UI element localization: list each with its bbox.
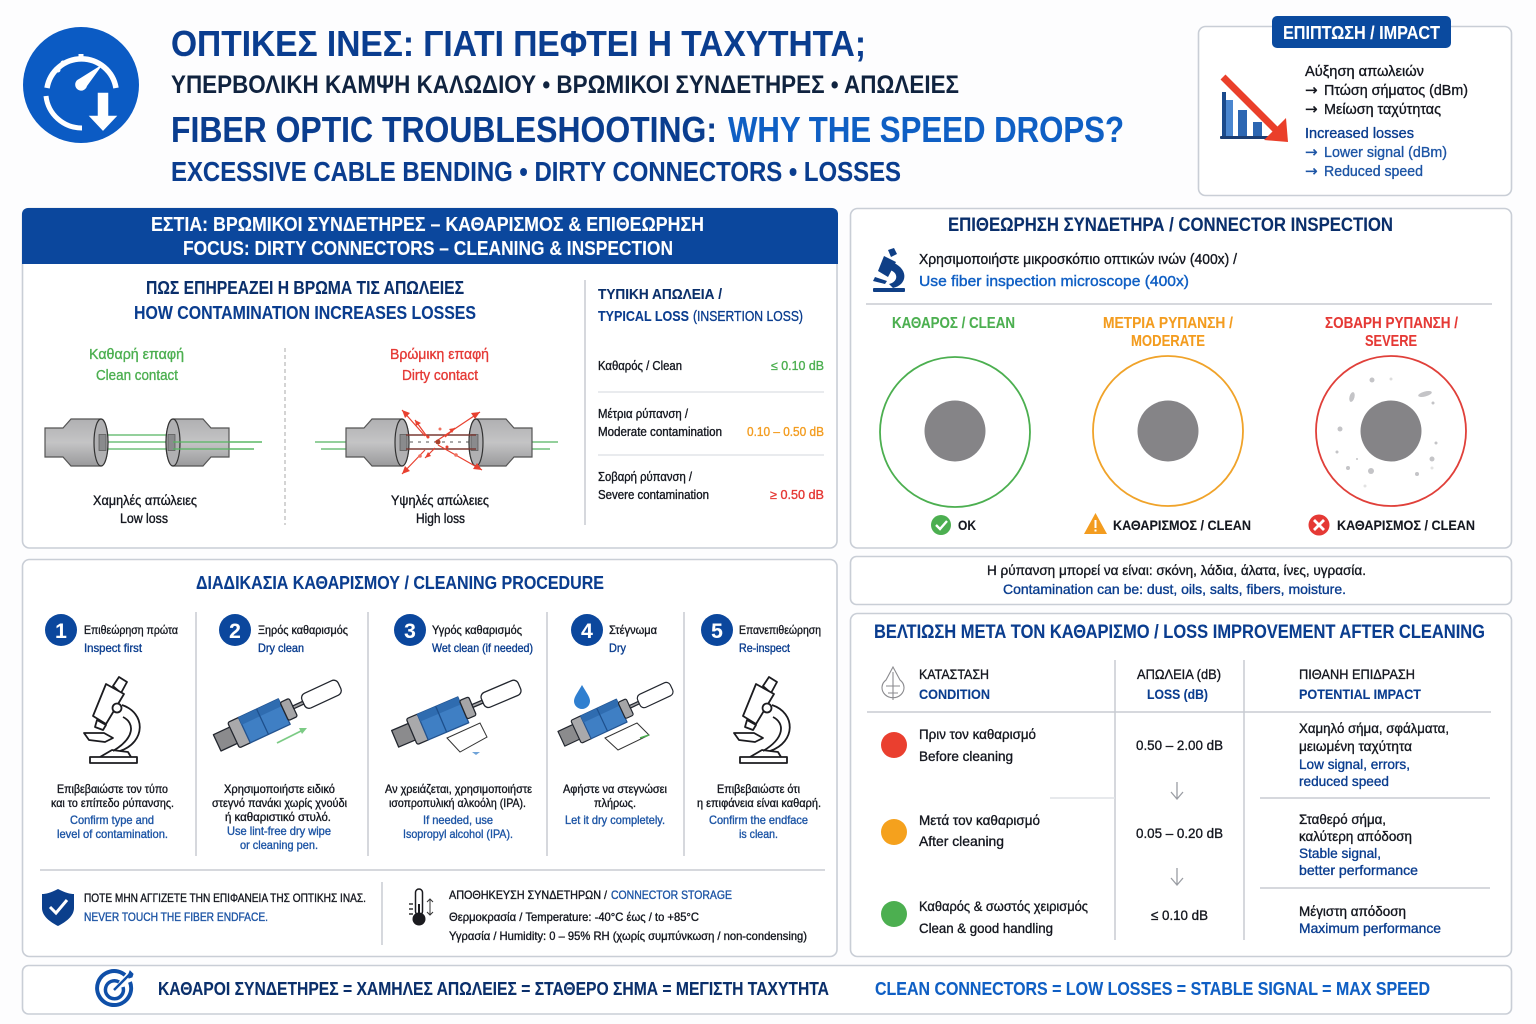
step 5: re-inspect: Επιβεβαιώστε ότι: [717, 782, 800, 796]
step 4: dry: Let it dry completely.: [565, 813, 665, 827]
step 4: dry: Αφήστε να στεγνώσει: [563, 782, 667, 796]
impact tab heading: ΕΠΙΠΤΩΣΗ / IMPACT: [1283, 23, 1440, 43]
row: after cleaning: Μετά τον καθαρισμό: [919, 812, 1040, 828]
summary equation english: CLEAN CONNECTORS = LOW LOSSES = STABLE SIGNAL = MAX SPEED: [875, 978, 1430, 999]
step 1: inspect first: [45, 614, 178, 841]
impact text: Increased losses: [1305, 125, 1414, 142]
row: after cleaning: Stable signal,: [1299, 845, 1381, 861]
inspection: moderate contamination endface: ΜΕΤΡΙΑ ΡΥΠΑΝΣΗ /: [1103, 315, 1234, 332]
low loss caption: Low loss: [120, 511, 168, 526]
step 5: re-inspect: Επανεπιθεώρηση: [739, 623, 821, 637]
title block: ΥΠΕΡΒΟΛΙΚΗ ΚΑΜΨΗ ΚΑΛΩΔΙΟΥ • ΒΡΩΜΙΚΟΙ ΣΥΝΔΕΤΗΡΕΣ • ΑΠΩΛΕΙΕΣ: [171, 71, 959, 99]
typical loss table: Καθαρός / Clean: [598, 359, 682, 373]
high loss caption: Υψηλές απώλειες: [391, 493, 489, 508]
step 4: dry: Στέγνωμα: [609, 623, 657, 637]
typical loss table: Σοβαρή ρύπανση /: [598, 470, 692, 484]
step 3: wet clean: [385, 614, 533, 841]
connector storage text: Υγρασία / Humidity: 0 – 95% RH (χωρίς συμπύνκωση / non-condensing): [449, 929, 807, 943]
step 4: dry: πλήρως.: [594, 796, 636, 810]
step 3: wet clean: 3: [404, 620, 416, 643]
connector storage text: ΑΠΟΘΗΚΕΥΣΗ ΣΥΝΔΕΤΗΡΩΝ /: [449, 888, 608, 902]
impact text: →: [1305, 162, 1318, 180]
step 2: dry clean: [211, 614, 348, 852]
clean contact label: [89, 346, 184, 384]
icon: falling bars with red arrow: [1220, 77, 1288, 142]
table column headers: ΠΙΘΑΝΗ ΕΠΙΔΡΑΣΗ: [1299, 666, 1415, 682]
focus header band: FOCUS: DIRTY CONNECTORS – CLEANING & INSPECTION: [183, 238, 673, 260]
table column headers: POTENTIAL IMPACT: [1299, 686, 1421, 702]
contamination heading: HOW CONTAMINATION INCREASES LOSSES: [134, 303, 476, 323]
focus header band: ΕΣΤΙΑ: ΒΡΩΜΙΚΟΙ ΣΥΝΔΕΤΗΡΕΣ – ΚΑΘΑΡΙΣΜΟΣ & ΕΠΙΘΕΩΡΗΣΗ: [151, 214, 704, 236]
row: after cleaning: Σταθερό σήμα,: [1299, 811, 1386, 827]
inspection: severe contamination endface: [1308, 315, 1475, 536]
microscope instruction: Χρησιμοποιήστε μικροσκόπιο οπτικών ινών (400x) /: [919, 252, 1238, 268]
row: before cleaning: [881, 720, 1449, 789]
diagram: clean connector contact: [45, 419, 262, 466]
typical loss table: [598, 286, 824, 502]
step 5: re-inspect: [697, 614, 821, 841]
row: before cleaning: reduced speed: [1299, 773, 1389, 789]
inspection: clean endface: ΚΑΘΑΡΟΣ / CLEAN: [892, 315, 1015, 332]
title block: [171, 23, 1124, 187]
typical loss table: (INSERTION LOSS): [693, 308, 803, 325]
icon: condition gauge pin: [882, 667, 904, 700]
row: clean and good handling: Maximum performance: [1299, 920, 1441, 936]
typical loss table: Moderate contamination: [598, 425, 722, 439]
inspection: clean endface: [880, 315, 1030, 535]
panel: connector inspection: [850, 208, 1512, 548]
step 5: re-inspect: Confirm the endface: [709, 813, 808, 827]
step 2: dry clean: Dry clean: [258, 641, 304, 655]
procedure heading: ΔΙΑΔΙΚΑΣΙΑ ΚΑΘΑΡΙΣΜΟΥ / CLEANING PROCEDURE: [196, 573, 604, 593]
high loss caption: High loss: [416, 511, 465, 526]
connector storage text: [449, 888, 807, 943]
typical loss table: ≥ 0.50 dB: [770, 488, 824, 502]
title block: EXCESSIVE CABLE BENDING • DIRTY CONNECTORS • LOSSES: [171, 156, 901, 187]
diagram: dirty connector contact with scattering: [315, 410, 558, 474]
inspection: severe contamination endface: ΚΑΘΑΡΙΣΜΟΣ / CLEAN: [1337, 517, 1475, 533]
row: clean and good handling: Μέγιστη απόδοση: [1299, 903, 1406, 919]
inspection: moderate contamination endface: MODERATE: [1131, 333, 1205, 350]
icon: speed gauge with down arrow: [23, 27, 139, 143]
step 2: dry clean: ή καθαριστικό στυλό.: [225, 810, 331, 824]
step 5: re-inspect: 5: [711, 620, 723, 643]
table column headers: [919, 666, 1421, 702]
table column headers: ΚΑΤΑΣΤΑΣΗ: [919, 666, 989, 682]
inspection: moderate contamination endface: ΚΑΘΑΡΙΣΜΟΣ / CLEAN: [1113, 517, 1251, 533]
low loss caption: Χαμηλές απώλειες: [93, 493, 197, 508]
panel: impact: [1198, 16, 1512, 196]
typical loss table: ΤΥΠΙΚΗ ΑΠΩΛΕΙΑ /: [598, 286, 723, 303]
warning text: never touch endface: ΠΟΤΕ ΜΗΝ ΑΓΓΙΖΕΤΕ ΤΗΝ ΕΠΙΦΑΝΕΙΑ ΤΗΣ ΟΠΤΙΚΗΣ ΙΝΑΣ.: [84, 891, 366, 905]
step 4: dry: Dry: [609, 641, 626, 655]
dirty contact label: Dirty contact: [402, 367, 479, 384]
typical loss table: Μέτρια ρύπανση /: [598, 407, 688, 421]
microscope instruction: [919, 252, 1238, 290]
typical loss table: Severe contamination: [598, 488, 709, 502]
typical loss table: 0.10 – 0.50 dB: [747, 425, 824, 439]
icon: target with arrow: [97, 971, 133, 1005]
impact text: →: [1305, 81, 1318, 99]
clean contact label: Καθαρή επαφή: [89, 346, 184, 363]
clean contact label: Clean contact: [96, 367, 179, 384]
table column headers: CONDITION: [919, 686, 990, 702]
step 5: re-inspect: Re-inspect: [739, 641, 791, 655]
step 4: dry: 4: [581, 620, 593, 643]
panel: bottom summary banner: [22, 966, 1512, 1014]
step 3: wet clean: Isopropyl alcohol (IPA).: [403, 827, 513, 841]
high loss caption: [391, 493, 489, 526]
impact tab heading: [1272, 16, 1451, 48]
panel: contamination note: [850, 556, 1512, 604]
step 2: dry clean: Ξηρός καθαρισμός: [258, 623, 348, 637]
panel: focus on dirty connectors: [22, 208, 838, 548]
row: after cleaning: After cleaning: [919, 833, 1004, 849]
step 2: dry clean: στεγνό πανάκι χωρίς χνούδι: [212, 796, 347, 810]
row: before cleaning: Πριν τον καθαρισμό: [919, 726, 1036, 742]
panel: cleaning procedure: [22, 560, 837, 956]
row: before cleaning: Low signal, errors,: [1299, 756, 1410, 772]
step 1: inspect first: 1: [55, 620, 67, 643]
title block: ΟΠΤΙΚΕΣ ΙΝΕΣ: ΓΙΑΤΙ ΠΕΦΤΕΙ Η ΤΑΧΥΤΗΤΑ;: [171, 23, 866, 64]
impact text: Πτώση σήματος (dBm): [1324, 82, 1468, 99]
impact text: →: [1305, 143, 1318, 161]
panel: contamination note: Η ρύπανση μπορεί να είναι: σκόνη, λάδια, άλατα, ίνες, υγρασία.: [987, 562, 1366, 578]
step 1: inspect first: level of contamination.: [57, 827, 168, 841]
arrow: down to clean handling: [1171, 868, 1183, 885]
row: before cleaning: 0.50 – 2.00 dB: [1136, 737, 1223, 753]
typical loss table: TYPICAL LOSS: [598, 308, 689, 325]
icon: navy microscope: [873, 248, 905, 292]
microscope instruction: Use fiber inspection microscope (400x): [919, 273, 1189, 290]
row: clean and good handling: ≤ 0.10 dB: [1151, 907, 1208, 923]
step 1: inspect first: Inspect first: [84, 641, 143, 655]
step 2: dry clean: Χρησιμοποιήστε ειδικό: [224, 782, 335, 796]
icon: shield with check: [42, 889, 74, 926]
panel: loss improvement table: [850, 614, 1512, 956]
title block: FIBER OPTIC TROUBLESHOOTING:: [171, 109, 717, 150]
connector storage text: CONNECTOR STORAGE: [611, 888, 732, 902]
row: clean and good handling: [881, 898, 1441, 936]
step 5: re-inspect: is clean.: [739, 827, 778, 841]
warning text: never touch endface: [84, 891, 366, 924]
dirty contact label: Βρώμικη επαφή: [390, 346, 489, 363]
impact text: [1305, 63, 1468, 180]
impact text: Reduced speed: [1324, 163, 1423, 180]
inspection heading: ΕΠΙΘΕΩΡΗΣΗ ΣΥΝΔΕΤΗΡΑ / CONNECTOR INSPECTION: [948, 215, 1393, 236]
row: after cleaning: καλύτερη απόδοση: [1299, 828, 1412, 844]
inspection: moderate contamination endface: [1084, 315, 1251, 534]
step 5: re-inspect: η επιφάνεια είναι καθαρή.: [697, 796, 821, 810]
inspection: clean endface: OK: [958, 517, 976, 533]
row: clean and good handling: Καθαρός & σωστός χειρισμός: [919, 898, 1088, 914]
impact text: Μείωση ταχύτητας: [1324, 101, 1441, 118]
arrow: down to after cleaning: [1171, 782, 1183, 799]
row: after cleaning: [881, 811, 1418, 878]
table column headers: ΑΠΩΛΕΙΑ (dB): [1137, 666, 1221, 682]
row: after cleaning: better performance: [1299, 862, 1418, 878]
step 3: wet clean: Wet clean (if needed): [432, 641, 533, 655]
step 1: inspect first: Επιβεβαιώστε τον τύπο: [57, 782, 168, 796]
step 3: wet clean: ισοπροπυλική αλκοόλη (IPA).: [389, 796, 526, 810]
focus header band: [22, 208, 838, 264]
step 3: wet clean: Υγρός καθαρισμός: [432, 623, 522, 637]
step 1: inspect first: Confirm type and: [70, 813, 154, 827]
inspection: severe contamination endface: ΣΟΒΑΡΗ ΡΥΠΑΝΣΗ /: [1325, 315, 1459, 332]
contamination heading: ΠΩΣ ΕΠΗΡΕΑΖΕΙ Η ΒΡΩΜΑ ΤΙΣ ΑΠΩΛΕΙΕΣ: [146, 278, 464, 298]
step 2: dry clean: 2: [229, 620, 241, 643]
row: clean and good handling: Clean & good handling: [919, 920, 1053, 936]
warning text: never touch endface: NEVER TOUCH THE FIBER ENDFACE.: [84, 910, 268, 924]
step 3: wet clean: Αν χρειάζεται, χρησιμοποιήστε: [385, 782, 533, 796]
icon: thermometer: [409, 889, 433, 926]
row: before cleaning: Χαμηλό σήμα, σφάλματα,: [1299, 720, 1449, 736]
impact text: Αύξηση απωλειών: [1305, 63, 1424, 80]
typical loss table: ≤ 0.10 dB: [771, 359, 824, 373]
step 2: dry clean: Use lint-free dry wipe: [227, 824, 331, 838]
connector storage text: Θερμοκρασία / Temperature: -40°C έως / to +85°C: [449, 910, 699, 924]
step 2: dry clean: or cleaning pen.: [240, 838, 318, 852]
step 1: inspect first: και το επίπεδο ρύπανσης.: [51, 796, 174, 810]
panel: contamination note: Contamination can be: dust, oils, salts, fibers, moisture.: [1003, 581, 1346, 597]
inspection: severe contamination endface: SEVERE: [1365, 333, 1417, 350]
contamination heading: [134, 278, 476, 323]
step 3: wet clean: If needed, use: [423, 813, 493, 827]
title block: WHY THE SPEED DROPS?: [728, 109, 1124, 150]
summary equation greek: ΚΑΘΑΡΟΙ ΣΥΝΔΕΤΗΡΕΣ = ΧΑΜΗΛΕΣ ΑΠΩΛΕΙΕΣ = ΣΤΑΘΕΡΟ ΣΗΜΑ = ΜΕΓΙΣΤΗ ΤΑΧΥΤΗΤΑ: [158, 978, 829, 999]
row: before cleaning: μειωμένη ταχύτητα: [1299, 738, 1412, 754]
row: before cleaning: Before cleaning: [919, 748, 1013, 764]
step 1: inspect first: Επιθεώρηση πρώτα: [84, 623, 178, 637]
step 4: dry: [556, 614, 677, 827]
low loss caption: [93, 493, 197, 526]
row: after cleaning: 0.05 – 0.20 dB: [1136, 825, 1223, 841]
impact text: →: [1305, 100, 1318, 118]
table column headers: LOSS (dB): [1147, 686, 1208, 702]
dirty contact label: [390, 346, 489, 384]
impact text: Lower signal (dBm): [1324, 144, 1447, 161]
